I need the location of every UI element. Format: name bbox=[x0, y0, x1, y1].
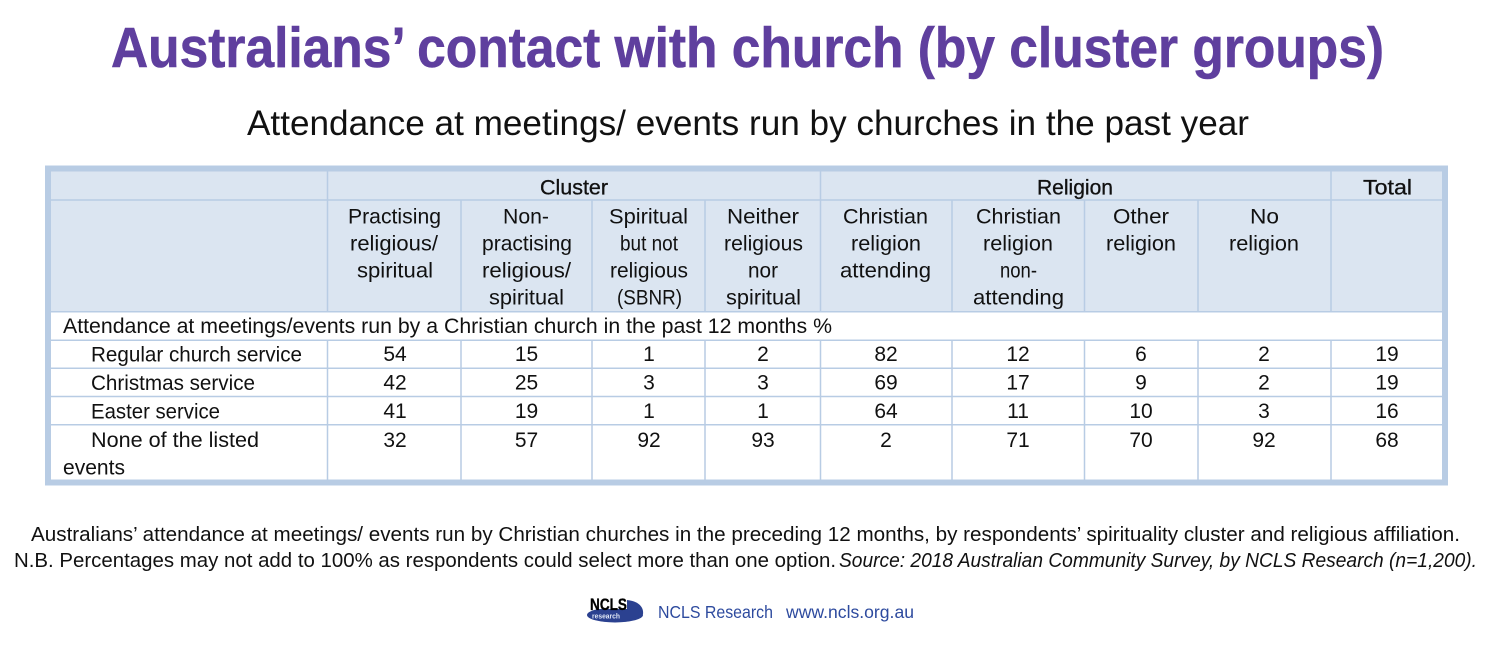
row: Christmas service: 19 bbox=[1375, 372, 1399, 394]
column headings: cluster: spiritual bbox=[357, 260, 433, 282]
icon: NCLS logo: NCLS bbox=[590, 595, 627, 614]
row: Regular church service: 1 bbox=[643, 343, 655, 366]
row: None of the listed events: 92 bbox=[637, 429, 661, 452]
column headings: religion: Christian bbox=[976, 206, 1061, 228]
row: Regular church service: 6 bbox=[1135, 343, 1147, 366]
row: Easter service: 64 bbox=[874, 400, 898, 423]
row: Regular church service: 2 bbox=[757, 343, 769, 366]
column headings: religion: attending bbox=[840, 260, 931, 282]
column headings: cluster: Non- bbox=[503, 206, 549, 228]
footer organisation and URL bbox=[658, 602, 914, 622]
column headings: cluster: spiritual bbox=[726, 286, 801, 310]
row: None of the listed events bbox=[63, 429, 1399, 480]
row: None of the listed events: 32 bbox=[383, 429, 407, 452]
row: Regular church service: 19 bbox=[1375, 343, 1399, 366]
column headings: cluster: (SBNR) bbox=[617, 286, 682, 310]
column headings: cluster: but not bbox=[620, 232, 678, 256]
row: None of the listed events: 68 bbox=[1375, 429, 1399, 452]
row: Regular church service: 12 bbox=[1006, 343, 1030, 366]
row: None of the listed events: 92 bbox=[1252, 429, 1276, 452]
row: Easter service: 11 bbox=[1007, 400, 1029, 423]
row: Regular church service: Regular church service bbox=[91, 344, 302, 366]
row: Christmas service: 42 bbox=[383, 372, 407, 394]
row: Easter service: 16 bbox=[1375, 400, 1399, 423]
column headings: cluster: Neither bbox=[727, 206, 799, 228]
row: Regular church service: 54 bbox=[383, 343, 407, 366]
caption: N.B. Percentages may not add to 100% as respondents could select more than one option. bbox=[14, 550, 836, 572]
table grid lines bbox=[51, 171, 1442, 480]
row: None of the listed events: 93 bbox=[751, 429, 775, 452]
row: Christmas service: 17 bbox=[1006, 372, 1030, 394]
row: None of the listed events: events bbox=[63, 456, 125, 480]
row: None of the listed events: 2 bbox=[880, 429, 892, 452]
column headings: cluster: spiritual bbox=[489, 286, 564, 310]
column headings: cluster: Spiritual bbox=[609, 206, 688, 228]
group headings row: Cluster bbox=[540, 176, 608, 200]
row: Christmas service: 3 bbox=[643, 372, 655, 394]
column headings: religion: religion bbox=[851, 232, 921, 256]
row: Christmas service: 3 bbox=[757, 372, 769, 394]
row: Easter service: 1 bbox=[757, 400, 769, 423]
footer organisation and URL: NCLS Research bbox=[658, 602, 773, 622]
column headings: cluster: religious bbox=[610, 260, 688, 282]
caption: Source: 2018 Australian Community Survey, by NCLS Research (n=1,200). bbox=[839, 550, 1477, 572]
row: Regular church service: 2 bbox=[1258, 343, 1270, 366]
column headings: religion: attending bbox=[973, 286, 1064, 310]
row: Christmas service: 9 bbox=[1135, 372, 1147, 394]
title: Australians’ contact with church (by cluster groups) bbox=[111, 16, 1384, 80]
group headings row bbox=[540, 176, 1412, 200]
caption: Australians’ attendance at meetings/ events run by Christian churches in the preceding 12 months, by respondents’ spirituality cluster and religious affiliation. bbox=[31, 524, 1460, 546]
column headings: religion: religion bbox=[1229, 232, 1299, 256]
group headings row: Religion bbox=[1037, 176, 1113, 200]
column headings: cluster: religious/ bbox=[350, 232, 438, 256]
row: Easter service: Easter service bbox=[91, 400, 220, 424]
column headings: cluster: religious/ bbox=[482, 260, 571, 282]
row: Christmas service: Christmas service bbox=[91, 372, 255, 395]
row: Easter service: 1 bbox=[643, 400, 655, 423]
group headings row: Total bbox=[1363, 176, 1412, 200]
column headings: religion: non- bbox=[1000, 260, 1037, 282]
row: None of the listed events: 70 bbox=[1129, 429, 1153, 452]
section row heading: Attendance at meetings/events run by a Christian church in the past 12 months % bbox=[63, 315, 832, 338]
row: Christmas service: 2 bbox=[1258, 372, 1270, 394]
row: Regular church service: 82 bbox=[874, 343, 898, 366]
row: Easter service bbox=[91, 400, 1399, 424]
row: Easter service: 19 bbox=[515, 400, 538, 423]
column headings: cluster: practising bbox=[482, 232, 572, 256]
table panel bbox=[48, 168, 1445, 482]
subtitle: Attendance at meetings/ events run by churches in the past year bbox=[247, 104, 1249, 143]
row: Easter service: 10 bbox=[1129, 400, 1153, 423]
column headings: religion: Other bbox=[1113, 206, 1169, 228]
column headings: cluster: religious bbox=[724, 232, 803, 256]
row: Easter service: 41 bbox=[383, 400, 407, 423]
caption bbox=[14, 524, 1477, 572]
column headings: religion bbox=[840, 206, 1299, 310]
row: Christmas service: 25 bbox=[515, 372, 538, 394]
row: None of the listed events: 71 bbox=[1006, 429, 1030, 452]
column headings: religion: No bbox=[1250, 206, 1279, 228]
column headings: religion: religion bbox=[983, 232, 1053, 256]
icon: NCLS logo: research bbox=[592, 614, 620, 620]
row: Christmas service: 69 bbox=[874, 372, 898, 394]
row: None of the listed events: 57 bbox=[515, 429, 538, 452]
footer organisation and URL: www.ncls.org.au bbox=[785, 602, 914, 622]
column headings: religion: religion bbox=[1106, 232, 1176, 256]
icon: NCLS logo bbox=[587, 595, 643, 622]
column headings: cluster: Practising bbox=[348, 206, 441, 228]
column headings: religion: Christian bbox=[843, 206, 928, 228]
row: Regular church service bbox=[91, 343, 1399, 366]
table header background bbox=[51, 172, 1442, 312]
row: None of the listed events: None of the listed bbox=[91, 429, 259, 452]
column headings: cluster: nor bbox=[748, 260, 778, 282]
table frame bbox=[48, 168, 1445, 482]
column headings: cluster bbox=[348, 206, 803, 310]
row: Christmas service bbox=[91, 372, 1399, 395]
row: Easter service: 3 bbox=[1258, 400, 1270, 423]
row: Regular church service: 15 bbox=[515, 343, 538, 366]
